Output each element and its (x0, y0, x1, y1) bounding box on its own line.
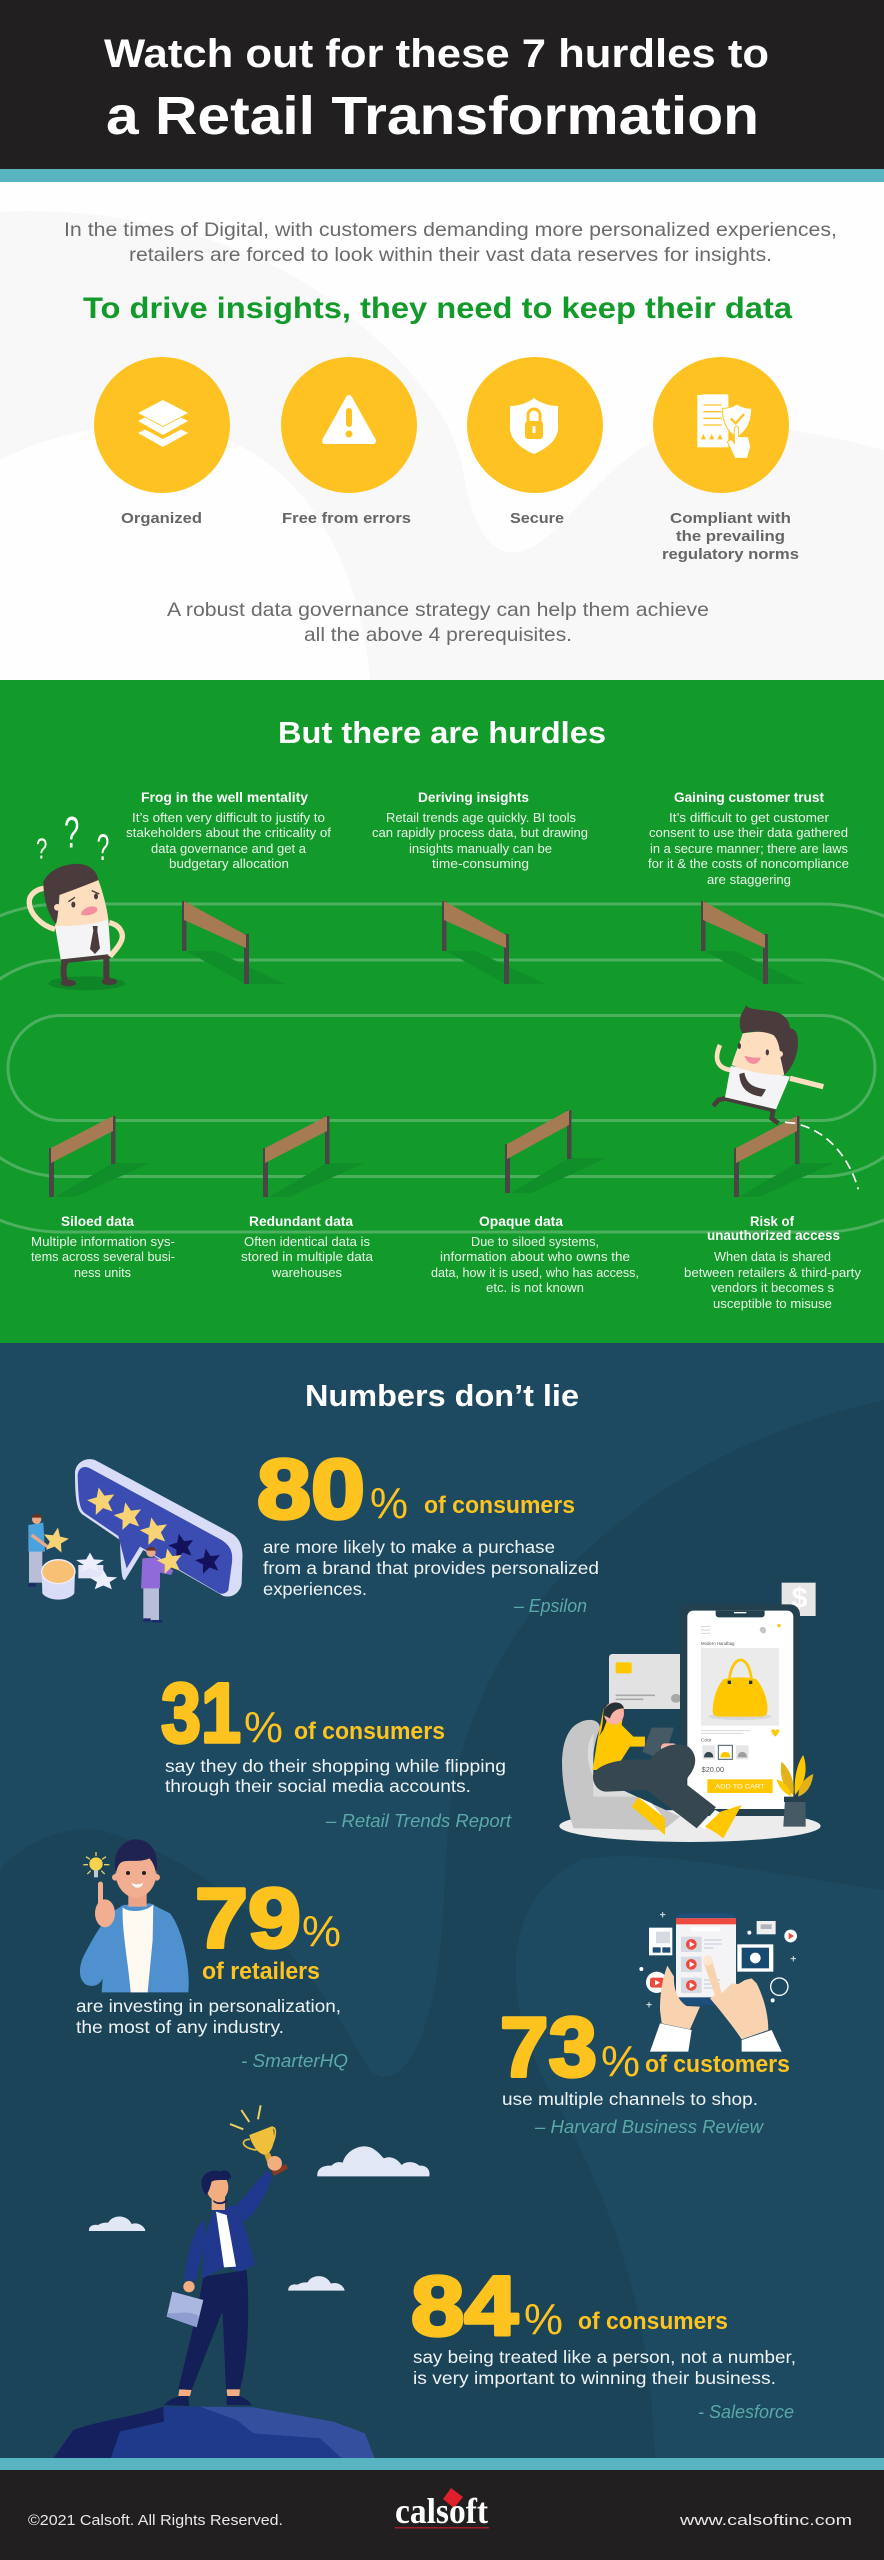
hurdle text: opaque data: Due to siloed systems, (471, 1235, 599, 1249)
hurdle text: deriving insights: Retail trends age quickly. BI tools (386, 811, 576, 825)
closing text: robust strategy: all the above 4 prerequisites. (304, 624, 572, 646)
stat: 73 percent: of customers (645, 2051, 790, 2078)
label: compliant: Compliant with (670, 510, 791, 527)
stat: 73 percent: – Harvard Business Review (534, 2117, 764, 2137)
stat: 80 percent: of consumers (424, 1492, 575, 1519)
stat: 84 percent (411, 2259, 796, 2422)
stat: 31 percent (161, 1666, 512, 1831)
illustration: confused man: ? (64, 809, 79, 858)
hurdle text: opaque data: Opaque data (479, 1214, 564, 1229)
stat: 31 percent: 31 (161, 1666, 241, 1760)
hurdle text: gaining customer trust: are staggering (707, 873, 791, 887)
hurdle text: frog in the well: Frog in the well mentality (141, 790, 308, 805)
hurdle text: frog in the well: stakeholders about the criticality of (126, 826, 332, 840)
intro text (64, 219, 837, 266)
stat: 73 percent: 73 (500, 2000, 597, 2094)
illustration: confused man: ? (36, 834, 47, 866)
hurdle text: gaining customer trust: consent to use their data gathered (649, 826, 848, 840)
label: compliant (662, 510, 799, 563)
illustration: star rating bubble (28, 1459, 242, 1623)
closing text: robust strategy: A robust data governance strategy can help them achieve (167, 599, 709, 621)
stat: 84 percent: of consumers (578, 2308, 728, 2335)
panel: numbers (0, 1343, 884, 2459)
hurdle text: gaining customer trust (648, 790, 849, 887)
logo: calsoft: calsoft (395, 2491, 488, 2531)
hurdle text: risk of unauthorized access: Risk of (750, 1214, 794, 1229)
hurdle text: redundant data: Redundant data (249, 1214, 353, 1229)
illustration: woman shopping on phone (559, 1582, 821, 1842)
hurdle text: siloed data: Multiple information sys- (31, 1235, 175, 1249)
stat: 73 percent (500, 2000, 790, 2137)
label: organized: Organized (121, 510, 202, 527)
hurdle: unauthorized access (734, 1116, 834, 1197)
stat: 79 percent: of retailers (202, 1958, 320, 1985)
stat: 31 percent: – Retail Trends Report (325, 1811, 512, 1831)
illustration: man with idea (80, 1839, 189, 1992)
hurdle text: deriving insights: can rapidly process data, but drawing (372, 826, 588, 840)
hurdle text: gaining customer trust: Gaining customer trust (674, 790, 824, 805)
hurdle: frog in the well (182, 901, 285, 984)
illustration: jumping man (713, 1005, 858, 1189)
hurdle text: frog in the well: data governance and get a (151, 842, 306, 856)
hurdle text: risk of unauthorized access: When data is shared (714, 1250, 831, 1264)
hurdle text: gaining customer trust: for it & the costs of noncompliance (648, 857, 849, 871)
stat: 79 percent: % (302, 1907, 341, 1956)
stat: 31 percent: say they do their shopping while flipping (165, 1756, 506, 1776)
heading: numbers don't lie: Numbers don’t lie (305, 1378, 579, 1413)
illustration: confused man: ? (97, 826, 109, 868)
illustration: woman shopping on phone: Color (701, 1738, 712, 1743)
hurdle text: risk of unauthorized access: unauthorized access (707, 1228, 840, 1243)
hurdle text: frog in the well: It’s often very difficult to justify to (132, 811, 325, 825)
hurdle text: redundant data: stored in multiple data (241, 1250, 373, 1264)
hurdle text: deriving insights: insights manually can be (409, 842, 552, 856)
illustration: confused man (29, 809, 125, 990)
stat: 79 percent: 79 (195, 1871, 301, 1965)
hurdle text: deriving insights: Deriving insights (418, 790, 529, 805)
illustration: woman shopping on phone: $ (792, 1582, 808, 1614)
stat: 84 percent: say being treated like a person, not a number, (413, 2347, 796, 2367)
hurdle: redundant data (263, 1116, 364, 1197)
hurdle: deriving insights (442, 901, 545, 984)
illustration: woman shopping on phone: Modern Handbag (701, 1641, 735, 1646)
stat: 80 percent: % (370, 1479, 408, 1528)
hurdle text: opaque data: etc. is not known (486, 1281, 584, 1295)
hurdle text: risk of unauthorized access: vendors it becomes s (711, 1281, 834, 1295)
label: compliant: the prevailing (676, 528, 785, 545)
hurdle text: risk of unauthorized access: between retailers & third-party (684, 1266, 862, 1280)
closing text: robust strategy (167, 599, 709, 646)
icon: compliance (653, 357, 789, 493)
running track lines (0, 904, 884, 1232)
hurdle: gaining trust (701, 901, 804, 984)
hurdle text: opaque data (431, 1214, 639, 1295)
title: a Retail Transformation (106, 86, 759, 146)
stat: 79 percent: - SmarterHQ (241, 2051, 348, 2071)
illustration: hands using phone (639, 1912, 797, 2052)
stat: 79 percent: are investing in personalization, (76, 1996, 341, 2016)
hurdle text: opaque data: information about who owns the (440, 1250, 630, 1264)
hurdle: opaque data (505, 1110, 606, 1193)
illustration: man with trophy on a rock (53, 2105, 430, 2459)
hurdle text: siloed data: tems across several busi- (31, 1250, 175, 1264)
hurdle: siloed data (49, 1116, 150, 1197)
icon: organized layers (94, 357, 230, 493)
panel: hurdles (0, 680, 884, 1344)
stat: 80 percent: – Epsilon (513, 1596, 587, 1616)
stat: 80 percent: experiences. (263, 1579, 367, 1599)
heading: to drive insights: To drive insights, they need to keep their data (83, 292, 792, 325)
stat: 31 percent: through their social media accounts. (165, 1776, 471, 1796)
title: Watch out for these 7 hurdles to (104, 32, 769, 76)
hurdle text: frog in the well (126, 790, 332, 871)
stat: 31 percent: % (244, 1703, 283, 1752)
hurdle text: gaining customer trust: in a secure manner; there are laws (650, 842, 848, 856)
hurdle text: risk of unauthorized access: usceptible to misuse (713, 1297, 832, 1311)
hurdle text: siloed data: Siloed data (61, 1214, 134, 1229)
stat: 84 percent: 84 (411, 2259, 518, 2353)
stat: 73 percent: % (601, 2037, 640, 2086)
label: secure: Secure (510, 510, 564, 527)
stat: 84 percent: % (524, 2295, 563, 2344)
stat: 84 percent: - Salesforce (698, 2402, 794, 2422)
hurdle text: risk of unauthorized access (684, 1214, 862, 1311)
stat: 84 percent: is very important to winning their business. (413, 2368, 776, 2388)
stat: 31 percent: of consumers (294, 1718, 445, 1745)
icon: secure shield (467, 357, 603, 493)
hurdle text: redundant data (241, 1214, 373, 1280)
hurdle text: redundant data: warehouses (271, 1266, 342, 1280)
hurdle text: deriving insights: time-consuming (432, 857, 529, 871)
stat: 73 percent: use multiple channels to shop. (502, 2089, 758, 2109)
stat: 79 percent (76, 1871, 348, 2071)
stat: 80 percent: are more likely to make a purchase (263, 1537, 555, 1557)
stat: 79 percent: the most of any industry. (76, 2017, 284, 2037)
copyright: ©2021 Calsoft. All Rights Reserved. (28, 2512, 283, 2529)
label: free from errors: Free from errors (282, 510, 411, 527)
hurdle text: siloed data (31, 1214, 175, 1280)
title (104, 32, 769, 146)
illustration: woman shopping on phone: ADD TO CART (715, 1784, 765, 1791)
intro text: In the times of Digital, with customers demanding more personalized experiences, (64, 219, 837, 241)
panel: footer (0, 2458, 884, 2560)
hurdle text: siloed data: ness units (74, 1266, 131, 1280)
website: www.calsoftinc.com (679, 2512, 852, 2529)
hurdle text: gaining customer trust: It’s difficult to get customer (669, 811, 829, 825)
panel: data prerequisites (0, 182, 884, 680)
hurdle text: frog in the well: budgetary allocation (169, 857, 289, 871)
hurdle text: deriving insights (372, 790, 588, 871)
heading: but there are hurdles: But there are hurdles (278, 715, 606, 750)
hurdle text: opaque data: data, how it is used, who has access, (431, 1266, 639, 1280)
icon: warning (281, 357, 417, 493)
illustration: woman shopping on phone: $20.00 (702, 1765, 724, 1774)
intro text: retailers are forced to look within their vast data reserves for insights. (129, 244, 772, 266)
label: compliant: regulatory norms (662, 546, 799, 563)
stat: 80 percent (257, 1442, 599, 1616)
hurdle text: redundant data: Often identical data is (244, 1235, 370, 1249)
stat: 80 percent: 80 (257, 1442, 365, 1536)
panel: header (0, 0, 884, 182)
stat: 80 percent: from a brand that provides personalized (263, 1558, 599, 1578)
